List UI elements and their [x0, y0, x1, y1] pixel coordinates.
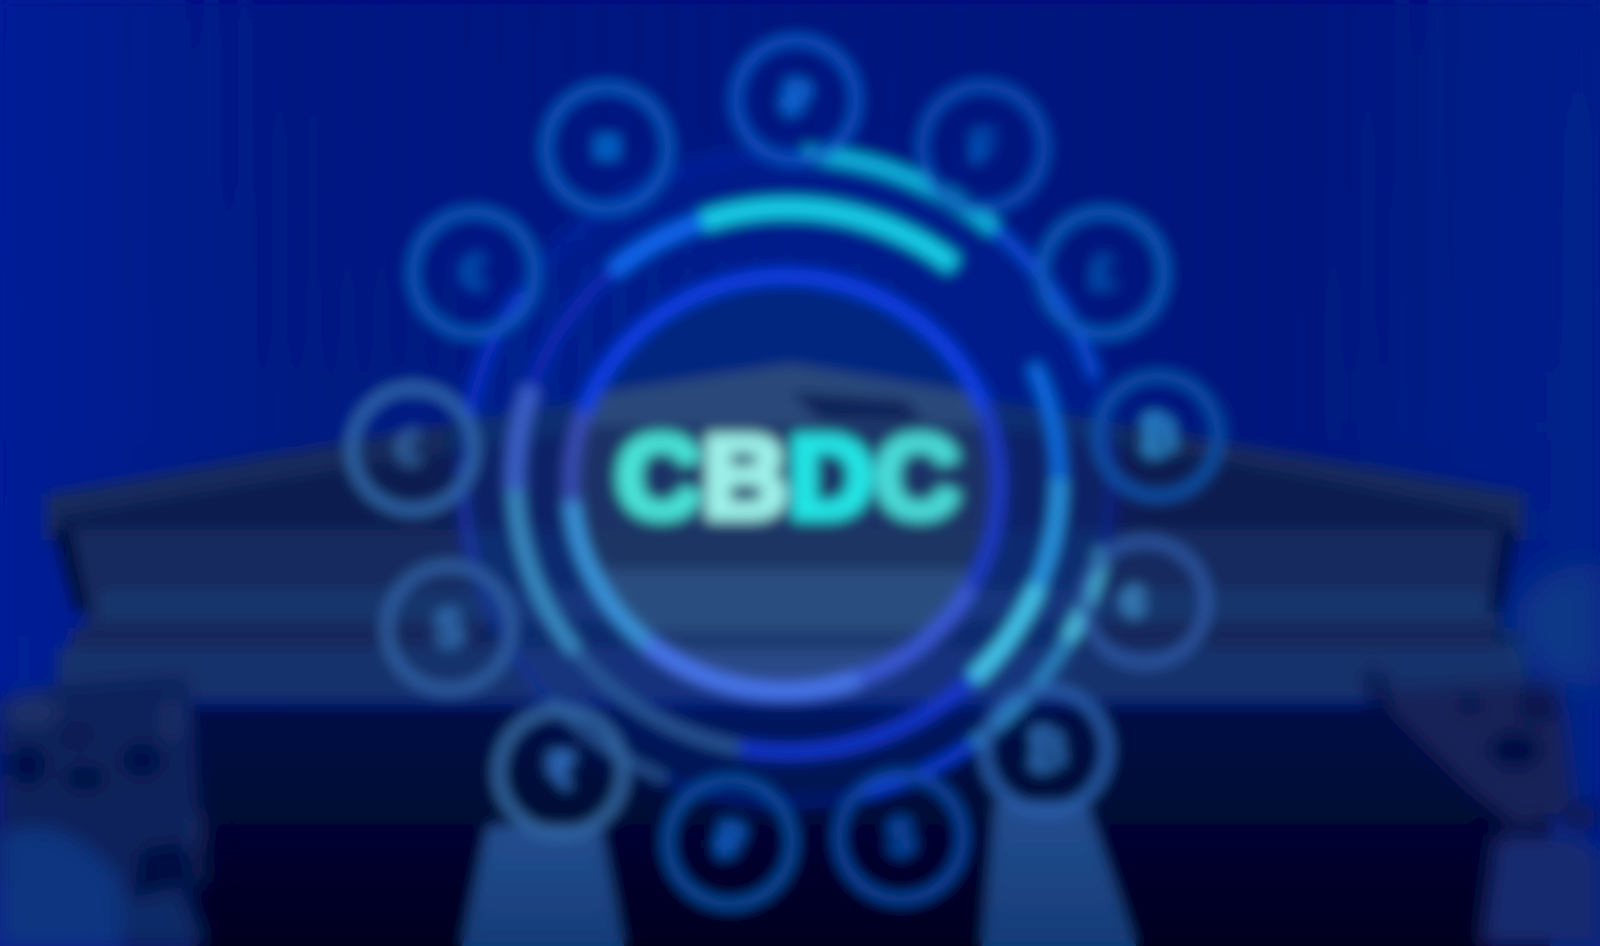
- coin: right middle: ₿: [1138, 407, 1178, 463]
- coin: top: ₽: [779, 71, 813, 127]
- entablature: [50, 530, 1524, 700]
- dark shadow at left of frieze: [52, 530, 90, 612]
- ring: middle: [515, 208, 1059, 752]
- dark interior: [190, 705, 1550, 946]
- coin: right low: ¢: [1120, 573, 1148, 629]
- coin: left low: [387, 566, 511, 690]
- coin: bottom right: $: [886, 807, 916, 867]
- capital: right: [1365, 672, 1596, 831]
- coin: left middle: €: [395, 420, 423, 476]
- coin: bottom right outer: ₿: [1025, 721, 1067, 779]
- column: centre left: [462, 826, 624, 946]
- coin: upper left: ¤: [593, 119, 621, 175]
- coin: upper left: [546, 87, 668, 209]
- coin: bottom left outer: [499, 710, 623, 834]
- coin: right high: [1042, 212, 1164, 334]
- column: far right: [1480, 835, 1600, 946]
- coin: bottom right outer: [985, 689, 1107, 811]
- coin: top: [736, 40, 856, 160]
- coin: right low: [1084, 541, 1206, 663]
- coin: left middle: [352, 388, 474, 510]
- roof pediment: [46, 364, 1524, 540]
- halo behind rings: [457, 148, 1117, 808]
- currency coins ring: [352, 40, 1218, 904]
- panel: bank building: [0, 364, 1600, 946]
- coin: right high: £: [1090, 247, 1117, 300]
- right edge foliage: [1515, 560, 1600, 690]
- ring: inner: [571, 276, 999, 692]
- coin: left low: $: [434, 598, 464, 658]
- coin: bottom left: [668, 780, 792, 904]
- coin: bottom left: ₽: [713, 813, 747, 869]
- coin: bottom right: [839, 775, 963, 899]
- coin: upper right: ₣: [970, 121, 996, 174]
- coin: left high: €: [460, 244, 488, 300]
- column: far left: [0, 826, 205, 946]
- title: CBDC: CBDC: [616, 412, 960, 542]
- column: centre right: [982, 802, 1136, 946]
- coin: left high: [413, 212, 535, 334]
- capital: left: [0, 675, 205, 946]
- ring: outer: [463, 154, 1111, 802]
- coin: right middle: [1098, 376, 1218, 496]
- coin: upper right: [922, 86, 1044, 208]
- coin: bottom left outer: ₹: [544, 743, 578, 799]
- panel: inner disc: [578, 289, 992, 682]
